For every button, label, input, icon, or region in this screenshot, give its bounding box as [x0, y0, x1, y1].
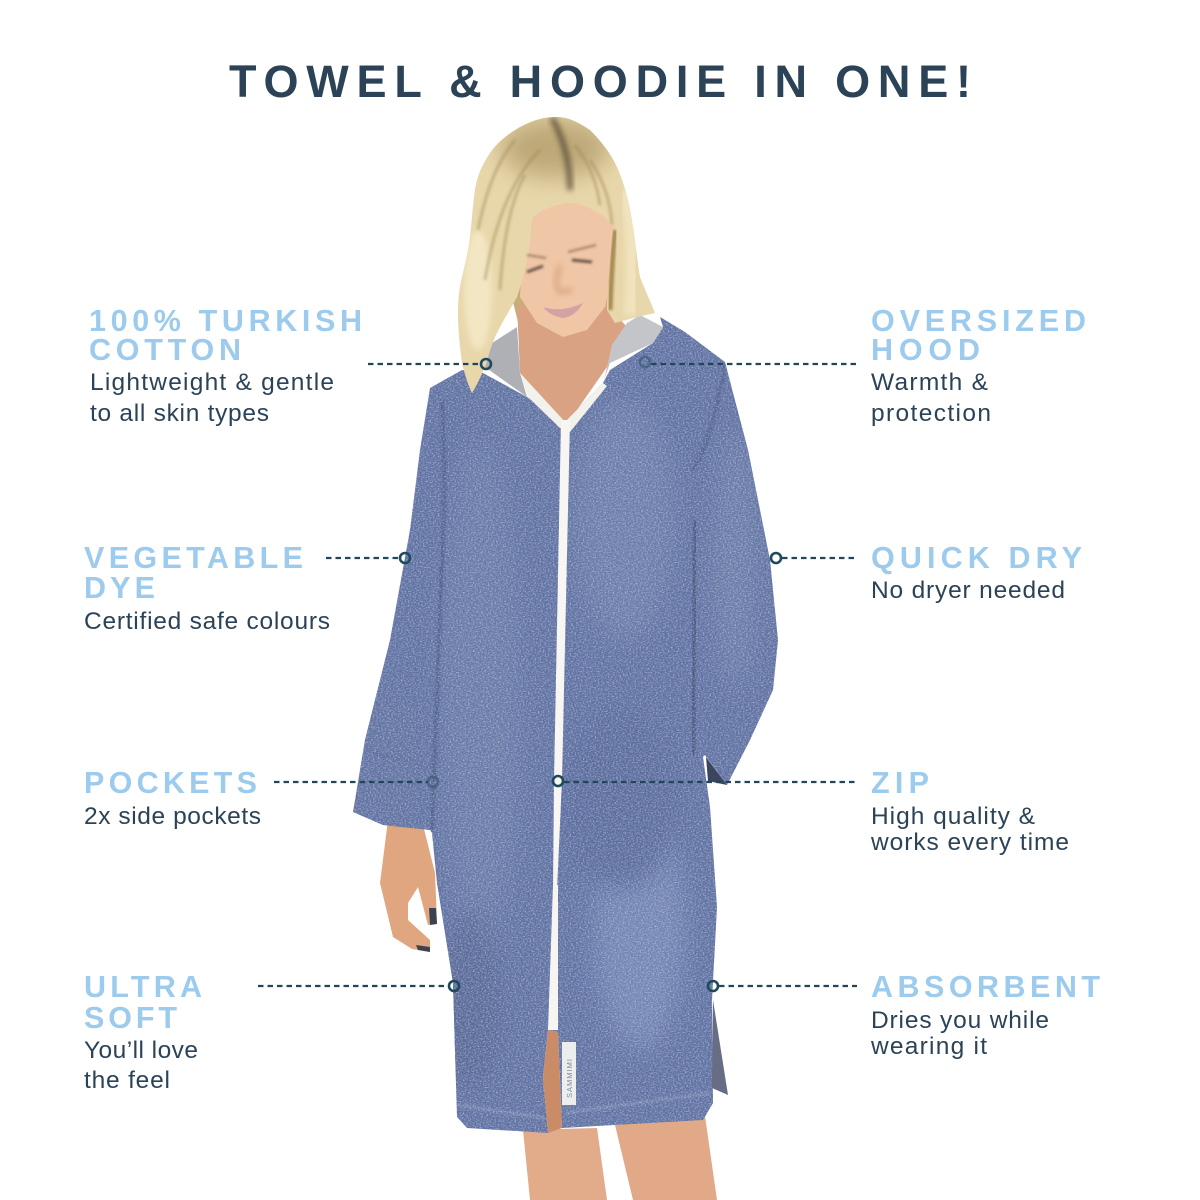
- neck and chest: [517, 305, 627, 422]
- callout: oversized hood: protection: [871, 400, 991, 427]
- inner dress: [548, 885, 558, 1030]
- callout: pockets: [84, 766, 438, 830]
- callout: quick dry: No dryer needed: [871, 577, 1065, 604]
- callout: absorbent: Dries you while: [871, 1007, 1049, 1034]
- callout: vegetable dye: [84, 541, 410, 635]
- callout: ultra soft: You’ll love: [84, 1037, 198, 1064]
- callout: zip: ZIP: [871, 766, 929, 800]
- callout: vegetable dye: VEGETABLE: [84, 541, 303, 575]
- callout: oversized hood: HOOD: [871, 333, 980, 367]
- callout: 100% Turkish cotton: Lightweight & gentle: [90, 369, 334, 396]
- callout: vegetable dye: DYE: [84, 571, 155, 605]
- zip: [553, 420, 570, 890]
- brand tag: [562, 1042, 576, 1105]
- face: [520, 198, 616, 337]
- callout: zip: High quality &: [871, 803, 1035, 830]
- callout: absorbent: wearing it: [870, 1033, 987, 1060]
- callout: zip: works every time: [870, 829, 1069, 856]
- callout: ultra soft: ULTRA: [84, 970, 202, 1004]
- callout: quick dry: QUICK DRY: [871, 541, 1082, 575]
- hand: [380, 820, 437, 952]
- callout: pockets: POCKETS: [84, 766, 257, 800]
- woman wearing hooded zip robe: [340, 110, 790, 1200]
- callout: ultra soft: [84, 970, 459, 1094]
- callout: oversized hood: Warmth &: [871, 369, 988, 396]
- facial features: [527, 245, 596, 318]
- callout: quick dry: [771, 541, 1082, 604]
- callout: zip: [553, 766, 1069, 856]
- brand tag: SAMMIMI: [565, 1058, 574, 1098]
- callout: 100% Turkish cotton: COTTON: [89, 333, 241, 367]
- grey hood lining left: [485, 327, 527, 397]
- side slit: [712, 1000, 728, 1095]
- callout: absorbent: [708, 970, 1100, 1060]
- callout: vegetable dye: Certified safe colours: [84, 608, 330, 635]
- right cuff interior: [706, 757, 727, 785]
- callout: oversized hood: [640, 304, 1086, 427]
- callout: ultra soft: SOFT: [84, 1001, 177, 1035]
- legs: [523, 1116, 717, 1200]
- hair: [458, 117, 655, 393]
- callout: 100% Turkish cotton: to all skin types: [90, 400, 269, 427]
- callout: 100% Turkish cotton: 100% TURKISH: [89, 304, 362, 338]
- robe fabric with sleeves: [340, 310, 790, 1140]
- skin visible in front slit: [543, 1030, 562, 1133]
- callout: ultra soft: the feel: [84, 1067, 170, 1094]
- callout: oversized hood: OVERSIZED: [871, 304, 1086, 338]
- callout: absorbent: ABSORBENT: [871, 970, 1100, 1004]
- title: TOWEL & HOODIE IN ONE!: [229, 56, 971, 107]
- callout: 100% Turkish cotton: [89, 304, 491, 427]
- grey hood lining right: [604, 315, 663, 380]
- white under layer: [520, 373, 607, 432]
- hair behind face: [510, 210, 620, 330]
- callout: pockets: 2x side pockets: [84, 803, 261, 830]
